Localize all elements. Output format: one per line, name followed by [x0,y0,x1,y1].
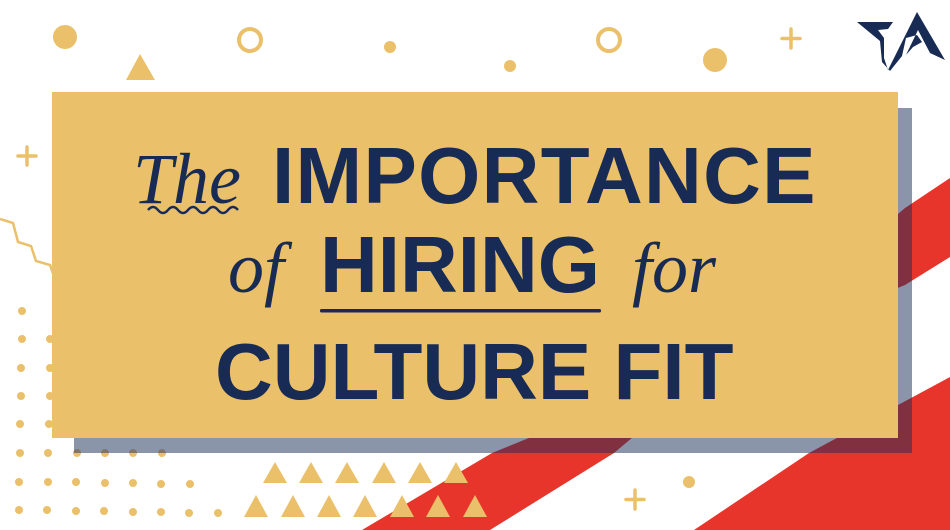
title line 1: The [133,139,241,219]
decoration: zigzag line [0,219,56,282]
title box [52,92,898,438]
logo [857,12,945,71]
title line 2 [228,220,717,312]
decoration: red diagonal stripes [362,178,950,530]
title line 1: IMPORTANCE [272,131,817,220]
decoration: top shapes [18,25,800,165]
decoration: bottom triangles [244,462,695,517]
title line 2: for [632,228,717,308]
title line 2: HIRING [320,220,600,309]
title [133,131,817,416]
title line 2: of [228,228,293,308]
box shadow [74,108,912,453]
title line 3: CULTURE FIT [215,327,734,416]
decoration: dot grid [15,307,222,517]
